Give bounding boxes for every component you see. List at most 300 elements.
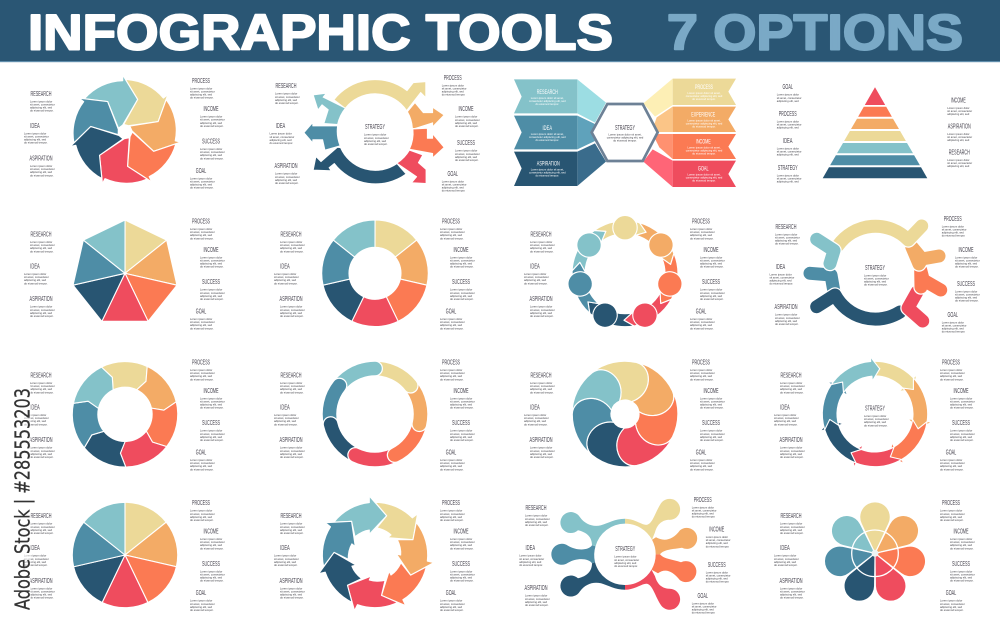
panel: swirl petals (524, 355, 725, 476)
labels: sit amet, consectetur (440, 320, 465, 324)
labels: INCOME (458, 106, 474, 113)
labels: do eiusmod tempor. (700, 297, 724, 301)
labels: sit amet, consectetur (947, 135, 972, 139)
labels: IDEA (776, 264, 785, 271)
labels: adipiscing elit, sed (690, 233, 712, 237)
labels: adipiscing elit, sed (30, 593, 52, 597)
ribbon labels: RESEARCH (537, 89, 558, 96)
labels: ASPIRATION (774, 304, 798, 311)
labels: ASPIRATION (274, 163, 298, 170)
labels: Lorem ipsum dolor (780, 523, 802, 526)
labels: do eiusmod tempor. (780, 390, 804, 394)
labels: adipiscing elit, sed (440, 605, 462, 609)
labels: sit amet, consectetur (940, 602, 965, 606)
labels: do eiusmod tempor. (30, 596, 54, 600)
labels: do eiusmod tempor. (690, 236, 714, 240)
labels: do eiusmod tempor. (200, 124, 224, 128)
labels: do eiusmod tempor. (30, 249, 54, 253)
labels: adipiscing elit, sed (940, 605, 962, 609)
labels: Lorem ipsum dolor (530, 447, 552, 450)
labels: adipiscing elit, sed (450, 261, 472, 266)
labels: adipiscing elit, sed (280, 387, 302, 391)
labels: SUCCESS (702, 420, 720, 427)
labels (274, 218, 475, 330)
labels: adipiscing elit, sed (200, 261, 222, 266)
label: strategy: do eiusmod tempor. (864, 283, 888, 287)
labels: INCOME (951, 98, 966, 104)
labels: sit amet, consectetur (777, 122, 802, 126)
labels: Lorem ipsum dolor (450, 570, 472, 573)
panel: pie (24, 490, 225, 620)
labels: Lorem ipsum dolor (706, 571, 728, 574)
ribbon labels: do eiusmod tempor. (692, 124, 716, 128)
labels: adipiscing elit, sed (30, 170, 52, 174)
labels: sit amet, consectetur (442, 86, 467, 90)
labels: sit amet, consectetur (700, 399, 725, 403)
chart: donut (314, 207, 443, 339)
labels: sit amet, consectetur (940, 371, 965, 375)
labels: SUCCESS (202, 138, 220, 146)
labels: SUCCESS (202, 561, 220, 568)
labels: RESEARCH (530, 232, 552, 238)
label: strategy: Lorem ipsum dolor (364, 134, 386, 137)
labels: INCOME (709, 526, 724, 534)
labels: do eiusmod tempor. (190, 467, 214, 471)
labels: adipiscing elit, sed (947, 138, 970, 142)
labels: adipiscing elit, sed (440, 464, 462, 468)
ribbon labels: consectetur adipiscing elit, sed (686, 149, 723, 153)
label: strategy: do eiusmod tempor. (864, 423, 888, 427)
labels: sit amet, consectetur (950, 432, 975, 436)
label: strategy: STRATEGY (865, 406, 885, 412)
labels: do eiusmod tempor. (455, 158, 479, 162)
labels: Lorem ipsum dolor (940, 459, 962, 462)
labels: GOAL (196, 450, 206, 456)
labels: Lorem ipsum dolor (274, 273, 296, 276)
labels: Lorem ipsum dolor (780, 447, 802, 450)
labels: adipiscing elit, sed (780, 528, 802, 532)
labels: sit amet, consectetur (777, 149, 802, 153)
labels: do eiusmod tempor. (770, 282, 793, 286)
labels: Lorem ipsum dolor (692, 602, 714, 605)
panel: swirl arrows pie (24, 65, 225, 200)
labels: adipiscing elit, sed (950, 576, 972, 580)
header banner (0, 0, 1000, 62)
labels: Lorem ipsum dolor (950, 397, 972, 400)
labels: IDEA (783, 138, 793, 145)
labels: Lorem ipsum dolor (530, 241, 552, 244)
labels: do eiusmod tempor. (950, 406, 974, 410)
labels: adipiscing elit, sed (700, 402, 722, 406)
labels: sit amet, consectetur (24, 275, 49, 279)
labels: RESEARCH (530, 372, 552, 380)
labels: ASPIRATION (530, 296, 553, 303)
labels: do eiusmod tempor. (706, 580, 730, 584)
labels: adipiscing elit, sed (190, 183, 212, 187)
chart: big arrows ring (303, 486, 442, 625)
labels (24, 218, 225, 330)
labels: sit amet, consectetur (524, 416, 549, 420)
labels: sit amet, consectetur (200, 258, 225, 262)
ribbon labels: consectetur adipiscing elit, sed (529, 171, 566, 175)
labels: sit amet, consectetur (519, 557, 544, 561)
labels: adipiscing elit, sed (275, 178, 297, 182)
labels: sit amet, consectetur (692, 508, 717, 512)
labels: sit amet, consectetur (200, 150, 225, 154)
labels: ASPIRATION (30, 296, 53, 303)
labels: adipiscing elit, sed (530, 246, 552, 250)
labels: adipiscing elit, sed (777, 126, 799, 130)
labels: adipiscing elit, sed (525, 520, 547, 524)
labels: Lorem ipsum dolor (200, 570, 222, 573)
labels: Lorem ipsum dolor (190, 510, 212, 513)
subtitle: 7 OPTIONS (667, 4, 963, 60)
labels: PROCESS (442, 218, 460, 226)
labels: adipiscing elit, sed (442, 186, 464, 190)
labels: sit amet, consectetur (190, 89, 215, 93)
labels: sit amet, consectetur (275, 95, 300, 99)
labels (24, 360, 225, 471)
labels: GOAL (446, 450, 456, 456)
labels: PROCESS (692, 218, 710, 226)
labels: sit amet, consectetur (775, 316, 800, 320)
labels: Lorem ipsum dolor (200, 148, 222, 151)
chart: rounded stubs ring (810, 226, 941, 321)
labels (774, 360, 975, 471)
labels: GOAL (697, 593, 708, 600)
labels: sit amet, consectetur (190, 320, 215, 324)
labels: RESEARCH (30, 232, 52, 238)
labels: SUCCESS (957, 281, 975, 288)
labels: INCOME (704, 388, 719, 395)
labels: Lorem ipsum dolor (190, 459, 212, 462)
labels: adipiscing elit, sed (524, 419, 546, 423)
labels: do eiusmod tempor. (950, 546, 974, 550)
labels: sit amet, consectetur (275, 175, 300, 179)
labels: ASPIRATION (30, 578, 53, 585)
labels: Lorem ipsum dolor (442, 84, 464, 87)
labels (774, 500, 975, 612)
labels: Lorem ipsum dolor (440, 369, 462, 372)
labels (524, 360, 725, 471)
labels: Lorem ipsum dolor (780, 587, 802, 590)
label: strategy: STRATEGY (615, 125, 635, 132)
labels: Lorem ipsum dolor (190, 87, 212, 90)
ribbon labels: consectetur adipiscing elit, sed (686, 176, 723, 180)
labels: do eiusmod tempor. (275, 181, 299, 185)
labels: do eiusmod tempor. (530, 314, 554, 318)
labels: sit amet, consectetur (777, 176, 802, 180)
labels: adipiscing elit, sed (780, 387, 802, 391)
labels: adipiscing elit, sed (530, 387, 552, 391)
labels: sit amet, consectetur (455, 152, 480, 156)
labels: adipiscing elit, sed (440, 233, 462, 237)
labels: adipiscing elit, sed (450, 402, 472, 406)
labels: sit amet, consectetur (530, 308, 555, 312)
labels: Lorem ipsum dolor (955, 290, 977, 293)
labels: PROCESS (694, 497, 712, 504)
labels: GOAL (946, 450, 956, 456)
labels: Lorem ipsum dolor (777, 174, 799, 177)
labels: adipiscing elit, sed (706, 576, 728, 580)
labels: do eiusmod tempor. (450, 546, 474, 550)
ribbon labels: GOAL (698, 166, 709, 173)
labels: ASPIRATION (280, 296, 303, 303)
ribbon labels: INCOME (696, 139, 711, 146)
labels: Lorem ipsum dolor (780, 382, 802, 385)
panel: rounded ring (274, 358, 475, 471)
labels: Lorem ipsum dolor (440, 459, 462, 462)
labels: SUCCESS (457, 140, 475, 147)
labels (270, 75, 480, 193)
label: strategy: adipiscing elit, sed (864, 420, 886, 424)
labels: adipiscing elit, sed (450, 294, 472, 298)
label: strategy: sit amet, consectetur (864, 417, 889, 421)
labels: Lorem ipsum dolor (275, 93, 297, 96)
labels: INCOME (704, 247, 719, 254)
labels: GOAL (196, 168, 206, 175)
labels: Lorem ipsum dolor (519, 555, 542, 558)
labels: Lorem ipsum dolor (450, 256, 472, 259)
labels: do eiusmod tempor. (440, 467, 464, 471)
ribbon labels: do eiusmod tempor. (535, 174, 559, 178)
labels: adipiscing elit, sed (190, 515, 212, 519)
labels: adipiscing elit, sed (440, 515, 462, 519)
labels: adipiscing elit, sed (524, 278, 546, 282)
labels: adipiscing elit, sed (950, 402, 972, 406)
labels: Lorem ipsum dolor (940, 600, 962, 603)
panel: jagged donut (24, 360, 225, 472)
labels: do eiusmod tempor. (706, 544, 730, 548)
labels: SUCCESS (202, 279, 220, 286)
labels: Lorem ipsum dolor (200, 538, 222, 541)
labels: Lorem ipsum dolor (190, 318, 212, 321)
ribbon labels: consectetur adipiscing elit, sed (529, 135, 566, 139)
labels: sit amet, consectetur (700, 258, 725, 262)
labels: SUCCESS (452, 561, 470, 568)
labels: do eiusmod tempor. (190, 186, 214, 190)
labels: do eiusmod tempor. (955, 265, 979, 269)
chart: flower petals (821, 502, 929, 606)
labels (274, 360, 475, 471)
labels: do eiusmod tempor. (200, 438, 224, 442)
labels: Lorem ipsum dolor (274, 555, 296, 558)
labels: Lorem ipsum dolor (777, 147, 799, 150)
labels: Lorem ipsum dolor (947, 133, 970, 136)
labels: sit amet, consectetur (30, 590, 55, 594)
labels: sit amet, consectetur (30, 449, 55, 453)
label: strategy: STRATEGY (865, 265, 885, 272)
labels: Lorem ipsum dolor (692, 506, 714, 509)
labels: adipiscing elit, sed (190, 605, 212, 609)
panel: ring with rounded stubs (770, 216, 980, 334)
label: strategy: do eiusmod tempor. (364, 142, 388, 146)
labels: Lorem ipsum dolor (690, 228, 712, 231)
label: strategy: Lorem ipsum dolor (864, 415, 886, 418)
ribbon labels: Lorem ipsum dolor sit amet, (687, 174, 721, 177)
labels: Lorem ipsum dolor (280, 523, 302, 526)
labels: Lorem ipsum dolor (24, 273, 46, 276)
labels: do eiusmod tempor. (275, 101, 299, 105)
labels: adipiscing elit, sed (455, 155, 477, 159)
labels: ASPIRATION (280, 437, 303, 444)
labels: adipiscing elit, sed (940, 374, 962, 378)
labels: SUCCESS (952, 561, 970, 568)
labels: SUCCESS (702, 279, 720, 286)
labels: sit amet, consectetur (942, 227, 967, 231)
vertical stock id text: Adobe Stock | #285553203 (10, 388, 34, 610)
labels: sit amet, consectetur (774, 557, 799, 561)
labels: Lorem ipsum dolor (270, 133, 292, 136)
labels: sit amet, consectetur (950, 573, 975, 577)
labels: adipiscing elit, sed (450, 576, 472, 580)
labels: Lorem ipsum dolor (30, 306, 52, 309)
labels: do eiusmod tempor. (780, 455, 804, 459)
ribbon labels (529, 84, 723, 183)
labels: ASPIRATION (30, 156, 53, 162)
labels: do eiusmod tempor. (200, 297, 224, 301)
labels: INCOME (204, 529, 219, 536)
labels: adipiscing elit, sed (30, 246, 52, 250)
labels: do eiusmod tempor. (700, 406, 724, 410)
labels: adipiscing elit, sed (274, 560, 296, 564)
label: strategy: STRATEGY (615, 546, 636, 553)
labels: do eiusmod tempor. (700, 438, 724, 442)
ribbon labels: do eiusmod tempor. (692, 97, 716, 101)
labels: do eiusmod tempor. (270, 141, 293, 145)
labels: Lorem ipsum dolor (524, 273, 546, 276)
labels: sit amet, consectetur (280, 590, 305, 594)
ribbon labels: do eiusmod tempor. (535, 102, 559, 106)
labels: ASPIRATION (530, 437, 553, 444)
labels: sit amet, consectetur (530, 449, 555, 453)
labels: INCOME (204, 106, 219, 113)
labels: do eiusmod tempor. (524, 281, 548, 285)
ribbon labels: Lorem ipsum dolor sit amet, (531, 133, 564, 136)
label: strategy: sit amet, consectetur (364, 136, 389, 140)
chart: swirl arrows (55, 65, 189, 200)
labels: do eiusmod tempor. (440, 377, 464, 381)
labels: sit amet, consectetur (530, 384, 555, 388)
labels: INCOME (454, 529, 469, 536)
labels: do eiusmod tempor. (690, 377, 714, 381)
label: strategy (364, 124, 389, 146)
labels: Lorem ipsum dolor (24, 414, 46, 417)
label: strategy: Lorem ipsum dolor (614, 556, 637, 559)
labels: do eiusmod tempor. (450, 265, 474, 269)
labels: GOAL (696, 308, 706, 316)
labels: adipiscing elit, sed (774, 419, 796, 423)
labels: adipiscing elit, sed (450, 543, 472, 547)
labels: RESEARCH (949, 150, 970, 156)
ribbon labels: PROCESS (695, 84, 713, 91)
labels: SUCCESS (952, 420, 970, 427)
labels: adipiscing elit, sed (190, 374, 212, 378)
labels: sit amet, consectetur (950, 540, 975, 544)
label: strategy: do eiusmod tempor. (614, 564, 638, 568)
labels: do eiusmod tempor. (442, 93, 466, 97)
labels: do eiusmod tempor. (519, 563, 543, 567)
labels: Lorem ipsum dolor (940, 510, 962, 513)
labels: adipiscing elit, sed (30, 452, 52, 456)
labels: GOAL (696, 450, 706, 456)
labels: sit amet, consectetur (30, 167, 55, 171)
labels: RESEARCH (30, 372, 52, 380)
labels: adipiscing elit, sed (942, 326, 964, 330)
labels: Lorem ipsum dolor (525, 595, 547, 598)
labels: Lorem ipsum dolor (30, 523, 52, 526)
labels: sit amet, consectetur (30, 308, 55, 312)
ribbon labels: do eiusmod tempor. (692, 179, 716, 183)
labels: Lorem ipsum dolor (24, 555, 46, 558)
labels: adipiscing elit, sed (947, 164, 970, 168)
labels: do eiusmod tempor. (280, 531, 304, 535)
labels: Lorem ipsum dolor (24, 132, 46, 135)
labels: adipiscing elit, sed (30, 528, 52, 532)
labels (24, 500, 225, 612)
labels: adipiscing elit, sed (700, 435, 722, 439)
labels: Lorem ipsum dolor (455, 150, 477, 153)
labels: sit amet, consectetur (780, 449, 805, 453)
labels: PROCESS (192, 360, 210, 366)
labels: PROCESS (444, 75, 462, 82)
labels: IDEA (530, 264, 540, 270)
labels: Lorem ipsum dolor (190, 600, 212, 603)
labels: adipiscing elit, sed (950, 435, 972, 439)
labels: sit amet, consectetur (940, 461, 965, 465)
labels: do eiusmod tempor. (200, 406, 224, 410)
label: strategy: do eiusmod tempor. (613, 138, 637, 142)
labels: do eiusmod tempor. (530, 390, 554, 394)
panel: ring of arrows (774, 348, 975, 480)
labels: sit amet, consectetur (274, 275, 299, 279)
labels: sit amet, consectetur (940, 512, 965, 516)
labels: sit amet, consectetur (274, 416, 299, 420)
labels: Lorem ipsum dolor (940, 369, 962, 372)
labels: sit amet, consectetur (200, 291, 225, 295)
labels: Lorem ipsum dolor (774, 414, 796, 417)
labels: do eiusmod tempor. (442, 189, 466, 193)
labels: adipiscing elit, sed (200, 543, 222, 547)
labels: sit amet, consectetur (280, 308, 305, 312)
labels: Lorem ipsum dolor (280, 447, 302, 450)
labels: do eiusmod tempor. (440, 236, 464, 240)
chart: ring arrows (304, 80, 444, 184)
labels: Lorem ipsum dolor (440, 600, 462, 603)
labels: ASPIRATION (780, 578, 803, 585)
labels: do eiusmod tempor. (455, 124, 479, 128)
labels: PROCESS (192, 500, 210, 507)
chart: pyramid (823, 87, 927, 178)
labels: do eiusmod tempor. (690, 467, 714, 471)
labels: sit amet, consectetur (780, 525, 805, 529)
labels: GOAL (196, 590, 206, 597)
labels: do eiusmod tempor. (24, 281, 48, 285)
labels: Lorem ipsum dolor (700, 430, 722, 433)
labels: adipiscing elit, sed (706, 541, 728, 545)
labels: Lorem ipsum dolor (777, 94, 799, 97)
labels: ASPIRATION (30, 437, 53, 444)
labels: sit amet, consectetur (455, 118, 480, 122)
labels: GOAL (196, 308, 206, 316)
labels: SUCCESS (708, 562, 726, 569)
labels: sit amet, consectetur (947, 161, 972, 165)
labels: do eiusmod tempor. (450, 438, 474, 442)
labels: do eiusmod tempor. (692, 515, 716, 519)
label: strategy: adipiscing elit, sed (864, 279, 886, 283)
labels: adipiscing elit, sed (440, 374, 462, 378)
labels: Lorem ipsum dolor (190, 177, 212, 180)
